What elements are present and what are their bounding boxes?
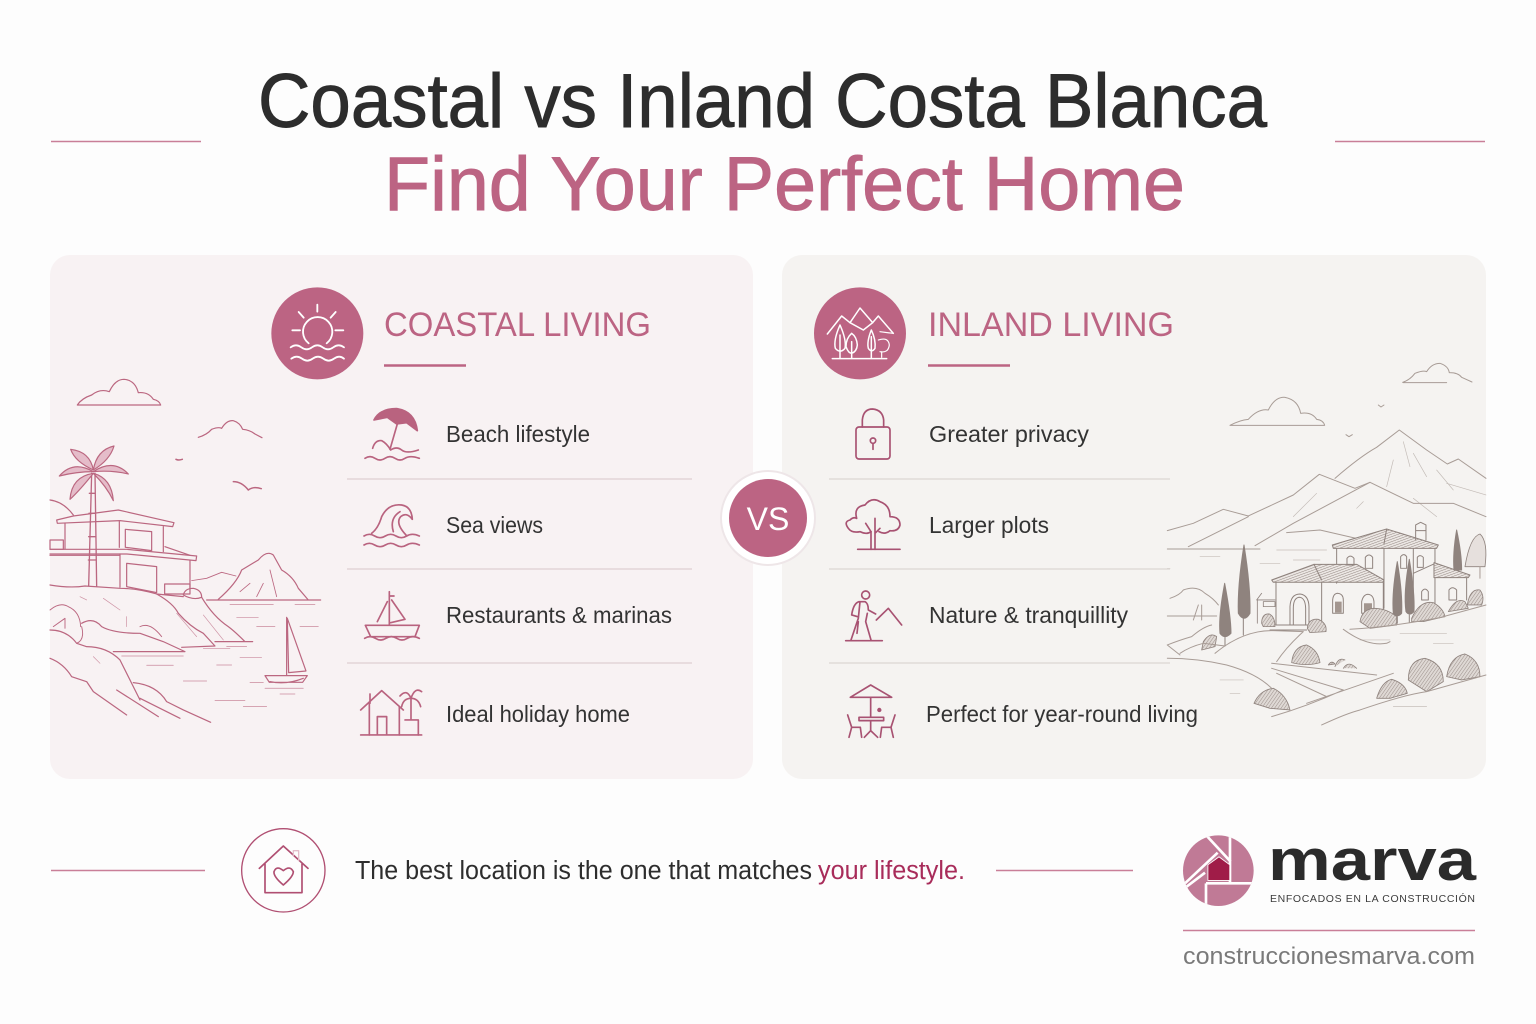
footer message: your lifestyle. [818, 857, 965, 885]
item: perfect for year-round living [848, 685, 1198, 737]
footer message [51, 829, 1133, 912]
website: construccionesmarva.com [1183, 943, 1475, 970]
icon: wave [364, 505, 419, 547]
item: nature and tranquillity: Nature & tranquillity [929, 602, 1128, 628]
item: sea views: Sea views [446, 512, 543, 538]
item: ideal holiday home [361, 690, 630, 735]
item: beach lifestyle [365, 409, 590, 460]
item: ideal holiday home: Ideal holiday home [446, 701, 630, 727]
icon: terrace table and umbrella [848, 685, 895, 737]
illustration: inland villa and mountains [1167, 363, 1486, 725]
bushes [1202, 534, 1486, 710]
heading: COASTAL LIVING [384, 306, 651, 344]
cypress trees [1220, 530, 1462, 646]
section header: inland [814, 287, 1174, 379]
land [1167, 658, 1272, 688]
subtitle: Find Your Perfect Home [384, 142, 1185, 227]
icon: house with palm [361, 690, 422, 735]
icon: hiker with mountain [846, 591, 902, 641]
villa [1257, 522, 1470, 630]
item: restaurants and marinas: Restaurants & marinas [446, 602, 672, 628]
vs badge: VS [747, 501, 789, 537]
tagline: ENFOCADOS EN LA CONSTRUCCIÓN [1270, 892, 1475, 905]
house [57, 510, 174, 527]
item: perfect for year-round living: Perfect for year-round living [926, 701, 1198, 727]
item: larger plots [846, 500, 1049, 549]
title: Coastal vs Inland Costa Blanca [258, 59, 1268, 144]
section header: coastal [271, 287, 651, 379]
sailboat [287, 617, 306, 675]
statement: The best location is the one that matches [355, 857, 812, 885]
icon: padlock [856, 409, 890, 459]
icon: tree [846, 500, 900, 549]
logo mark [1183, 835, 1254, 906]
icon: house with heart [242, 829, 325, 912]
shore [50, 585, 183, 597]
water [122, 605, 318, 707]
item: greater privacy [856, 409, 1090, 459]
panel: inland living [782, 255, 1486, 779]
heading: INLAND LIVING [928, 306, 1174, 344]
wordmark: marva [1268, 828, 1477, 893]
logo: marva [1183, 835, 1476, 964]
palm [88, 473, 97, 586]
icon: sun over waves [271, 287, 363, 379]
item: beach lifestyle: Beach lifestyle [446, 421, 590, 447]
panel: coastal living [50, 255, 753, 779]
mountains [1335, 430, 1486, 478]
icon: beach umbrella [365, 409, 419, 460]
vs badge [721, 471, 815, 565]
item: restaurants and marinas [365, 592, 672, 640]
illustration: coastal house and sea [50, 379, 321, 722]
item: sea views [364, 505, 543, 547]
item: nature and tranquillity [846, 591, 1128, 641]
item: greater privacy: Greater privacy [929, 421, 1090, 447]
item: larger plots: Larger plots [929, 512, 1049, 538]
title [258, 59, 1268, 227]
icon: sailing boat [365, 592, 419, 640]
icon: mountains and trees [814, 287, 906, 379]
